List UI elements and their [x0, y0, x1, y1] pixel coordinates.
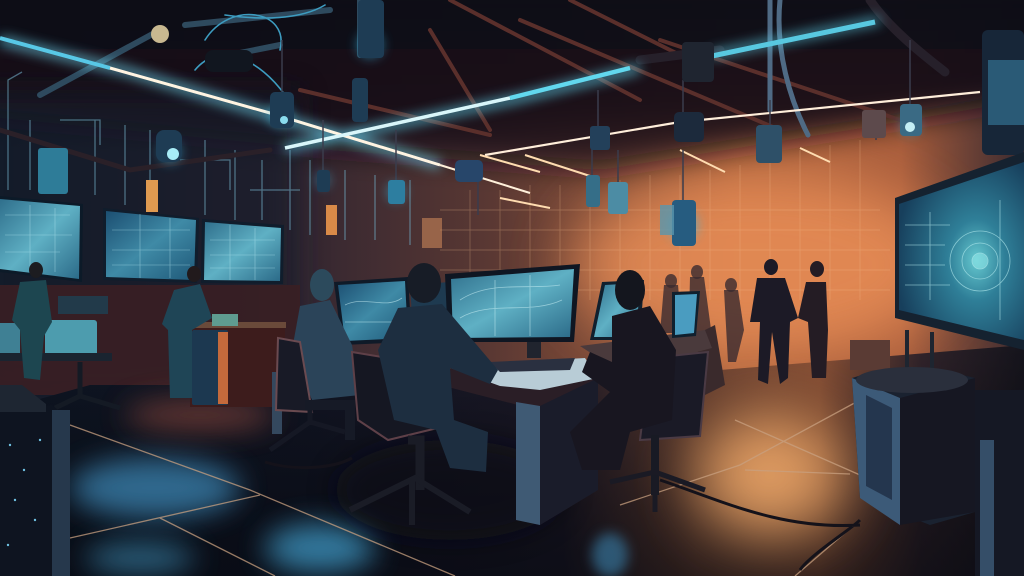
floor reflection: warm: [695, 413, 845, 537]
floor shadow: under desk: [335, 440, 565, 540]
monitor: center desk: [345, 264, 580, 372]
big monitor: [895, 30, 1024, 350]
person: standing far right: [798, 261, 828, 378]
person: standing at counter: [162, 266, 212, 398]
left counter: [0, 296, 286, 408]
floor reflection: red glow: [125, 399, 275, 431]
wall: reddish lower panel: [0, 285, 300, 395]
cables on floor: [265, 458, 860, 570]
floor seams: [70, 400, 860, 576]
right machinery: [850, 330, 1024, 576]
monitor: left desk: [334, 277, 450, 345]
monitor: right desk: [590, 280, 700, 340]
floor reflection: bottom blue: [265, 524, 375, 572]
floor reflection: bottom left blue: [85, 544, 195, 572]
ceiling: [0, 0, 1024, 170]
person: seated right with chair: [570, 270, 708, 512]
floor: [0, 345, 1024, 576]
person: left standing: [12, 262, 52, 380]
monitors on desk: [334, 264, 700, 372]
monitor: middle right: [201, 219, 284, 284]
grid: back wall circuitry: [440, 140, 890, 310]
person: seated back-left with chair: [270, 269, 360, 450]
wall: warm panels: [146, 180, 442, 248]
background people silhouettes: [660, 265, 744, 362]
left foreground server: [0, 385, 70, 576]
floor reflection: desk blue: [592, 533, 628, 576]
person: standing right: [750, 259, 798, 384]
wall monitors: [0, 196, 284, 284]
hanging lamps: [38, 0, 922, 246]
desk: [272, 325, 725, 525]
lights: ceiling light bars: [0, 20, 980, 208]
monitor: middle left: [103, 208, 199, 283]
left wall shading: [0, 90, 300, 390]
back wall: [0, 0, 1024, 400]
monitor: far left: [0, 196, 83, 282]
glow: warm back light: [570, 170, 950, 360]
person: seated center with chair: [350, 263, 498, 525]
wall: left circuitry pipes: [8, 72, 410, 245]
ceiling beams and pipes: [0, 0, 945, 170]
floor reflection: blue: [70, 458, 240, 518]
